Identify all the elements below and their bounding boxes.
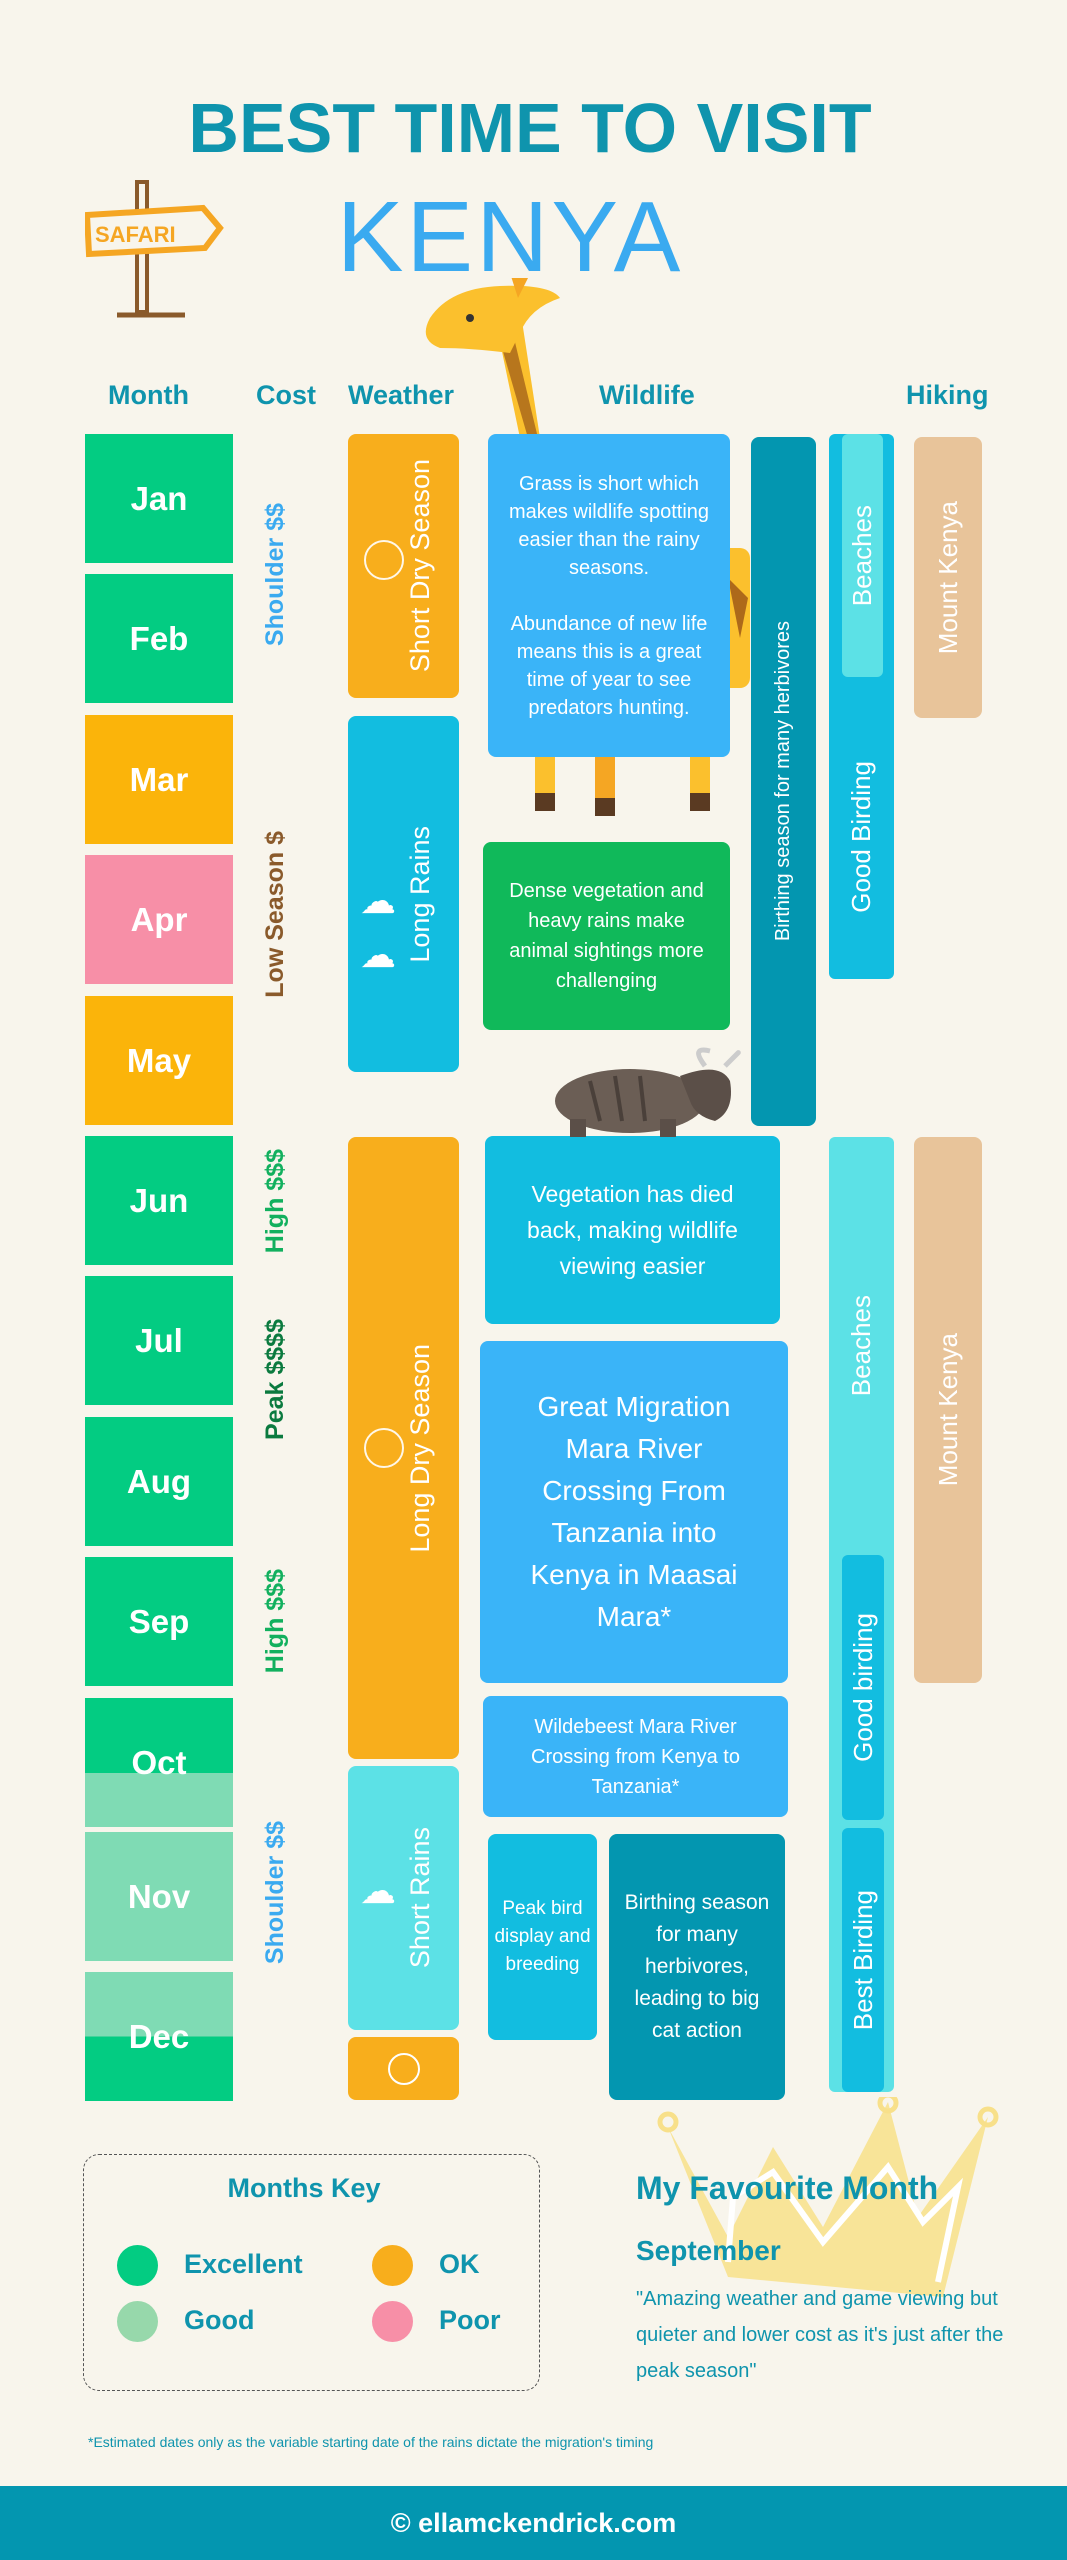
- icon: crown: [658, 2097, 998, 2297]
- wildlife notes: Vegetation has died back, making wildlife viewing easier: [527, 1181, 738, 1279]
- weather column: [348, 434, 459, 2100]
- bar: beaches bottom: [829, 1137, 894, 2092]
- months column: Mar: [130, 760, 188, 798]
- months column: Oct: [131, 1744, 186, 1780]
- bar: good birding top: Beaches: [847, 505, 877, 606]
- favourite month: [636, 2170, 1003, 2382]
- cost labels: [260, 503, 288, 1965]
- icon: safari sign: [85, 180, 224, 318]
- hiking: mount kenya 2: Mount Kenya: [932, 1333, 962, 1487]
- weather: short rains: Short Rains: [405, 1827, 435, 1969]
- months column: Apr: [131, 900, 187, 938]
- cost labels: High $$$: [260, 1569, 288, 1673]
- column headers: Weather: [348, 380, 454, 410]
- footer: [0, 2486, 1067, 2560]
- weather: long dry season: Long Dry Season: [405, 1344, 435, 1552]
- months column: Jun: [130, 1182, 188, 1218]
- months column: May: [127, 1042, 191, 1078]
- bar: beaches bottom: Beaches: [846, 1295, 876, 1397]
- icon: sun: [364, 540, 404, 580]
- bar: birthing season: [751, 437, 816, 1126]
- months key: Months Key: [227, 2173, 380, 2203]
- months key: OK: [439, 2249, 480, 2279]
- icon: giraffe: [426, 278, 750, 816]
- weather: long rains: Long Rains: [405, 826, 435, 962]
- cost labels: Shoulder $$: [260, 503, 288, 647]
- column headers: Month: [108, 380, 189, 410]
- cost labels: Peak $$$$: [260, 1319, 288, 1439]
- bar: beaches bottom: Good birding: [848, 1613, 878, 1762]
- wildlife notes: Abundance of new life means this is a great time of year to see predators hunting.: [511, 612, 707, 718]
- months column: Sep: [129, 1602, 189, 1640]
- months column: Nov: [128, 1878, 190, 1914]
- months column: Jan: [131, 480, 187, 516]
- hiking: mount kenya 2: [914, 1137, 982, 1683]
- wildlife notes: Wildebeest Mara River Crossing from Kenya to Tanzania*: [531, 1716, 740, 1798]
- wildlife notes: Great Migration Mara River Crossing From Tanzania into Kenya in Maasai Mara*: [530, 1391, 738, 1632]
- hiking: mount kenya: [914, 437, 982, 718]
- cost labels: High $$$: [260, 1149, 288, 1253]
- weather: short dry season: Short Dry Season: [405, 459, 435, 673]
- title: BEST TIME TO VISIT: [188, 89, 872, 167]
- column headers: Wildlife: [599, 380, 695, 410]
- icon: sun: [364, 1428, 404, 1468]
- bar: good birding top: Good Birding: [846, 761, 876, 912]
- bar: beaches bottom: Best Birding: [848, 1890, 878, 2030]
- icon: clouds: ☁: [360, 934, 396, 975]
- bar: birthing season: Birthing season for many herbivores: [772, 621, 794, 942]
- icon: clouds: [360, 880, 396, 975]
- months column: Aug: [127, 1462, 191, 1500]
- months column: Feb: [130, 620, 188, 656]
- months column: Dec: [129, 2018, 189, 2054]
- months key: [83, 2154, 540, 2391]
- cost labels: Shoulder $$: [260, 1821, 288, 1965]
- months key: Excellent: [184, 2249, 303, 2279]
- favourite month: My Favourite Month: [636, 2170, 938, 2206]
- icon: clouds: ☁: [360, 880, 396, 921]
- weather: short dry season: [348, 434, 459, 698]
- wildlife notes: Dense vegetation and heavy rains make animal sightings more challenging: [509, 880, 704, 992]
- weather: dry: [348, 2037, 459, 2100]
- months key: Good: [184, 2305, 254, 2335]
- column headers: Hiking: [906, 380, 989, 410]
- wildlife notes: Birthing season for many herbivores, leading to big cat action: [625, 1891, 769, 2042]
- months key: Poor: [439, 2305, 501, 2335]
- column headers: [108, 380, 989, 410]
- hiking: mount kenya: Mount Kenya: [932, 501, 962, 654]
- months column: Jul: [135, 1322, 183, 1358]
- months column: [85, 434, 233, 2101]
- favourite month: September: [636, 2235, 781, 2266]
- weather: short rains: [348, 1766, 459, 2030]
- icon: cloud: ☁: [360, 1870, 396, 1911]
- icon: wildebeest: [555, 1048, 741, 1137]
- wildlife notes: Grass is short which makes wildlife spotting easier than the rainy seasons.: [509, 472, 709, 578]
- icon: safari sign: SAFARI: [95, 222, 176, 247]
- weather: long dry season: [348, 1137, 459, 1759]
- wildlife notes: [480, 434, 788, 2100]
- column headers: Cost: [256, 380, 316, 410]
- favourite month: "Amazing weather and game viewing but quieter and lower cost as it's just after the peak season": [636, 2288, 1003, 2382]
- wildlife notes: Peak bird display and breeding: [494, 1898, 591, 1975]
- subtitle: Kenya: KENYA: [337, 181, 683, 293]
- footnote: *Estimated dates only as the variable starting date of the rains dictate the migration's timing: [88, 2434, 653, 2450]
- weather: long rains: [348, 716, 459, 1072]
- bar: good birding top: [829, 434, 894, 979]
- cost labels: Low Season $: [260, 831, 288, 997]
- footer: © ellamckendrick.com: [391, 2508, 676, 2538]
